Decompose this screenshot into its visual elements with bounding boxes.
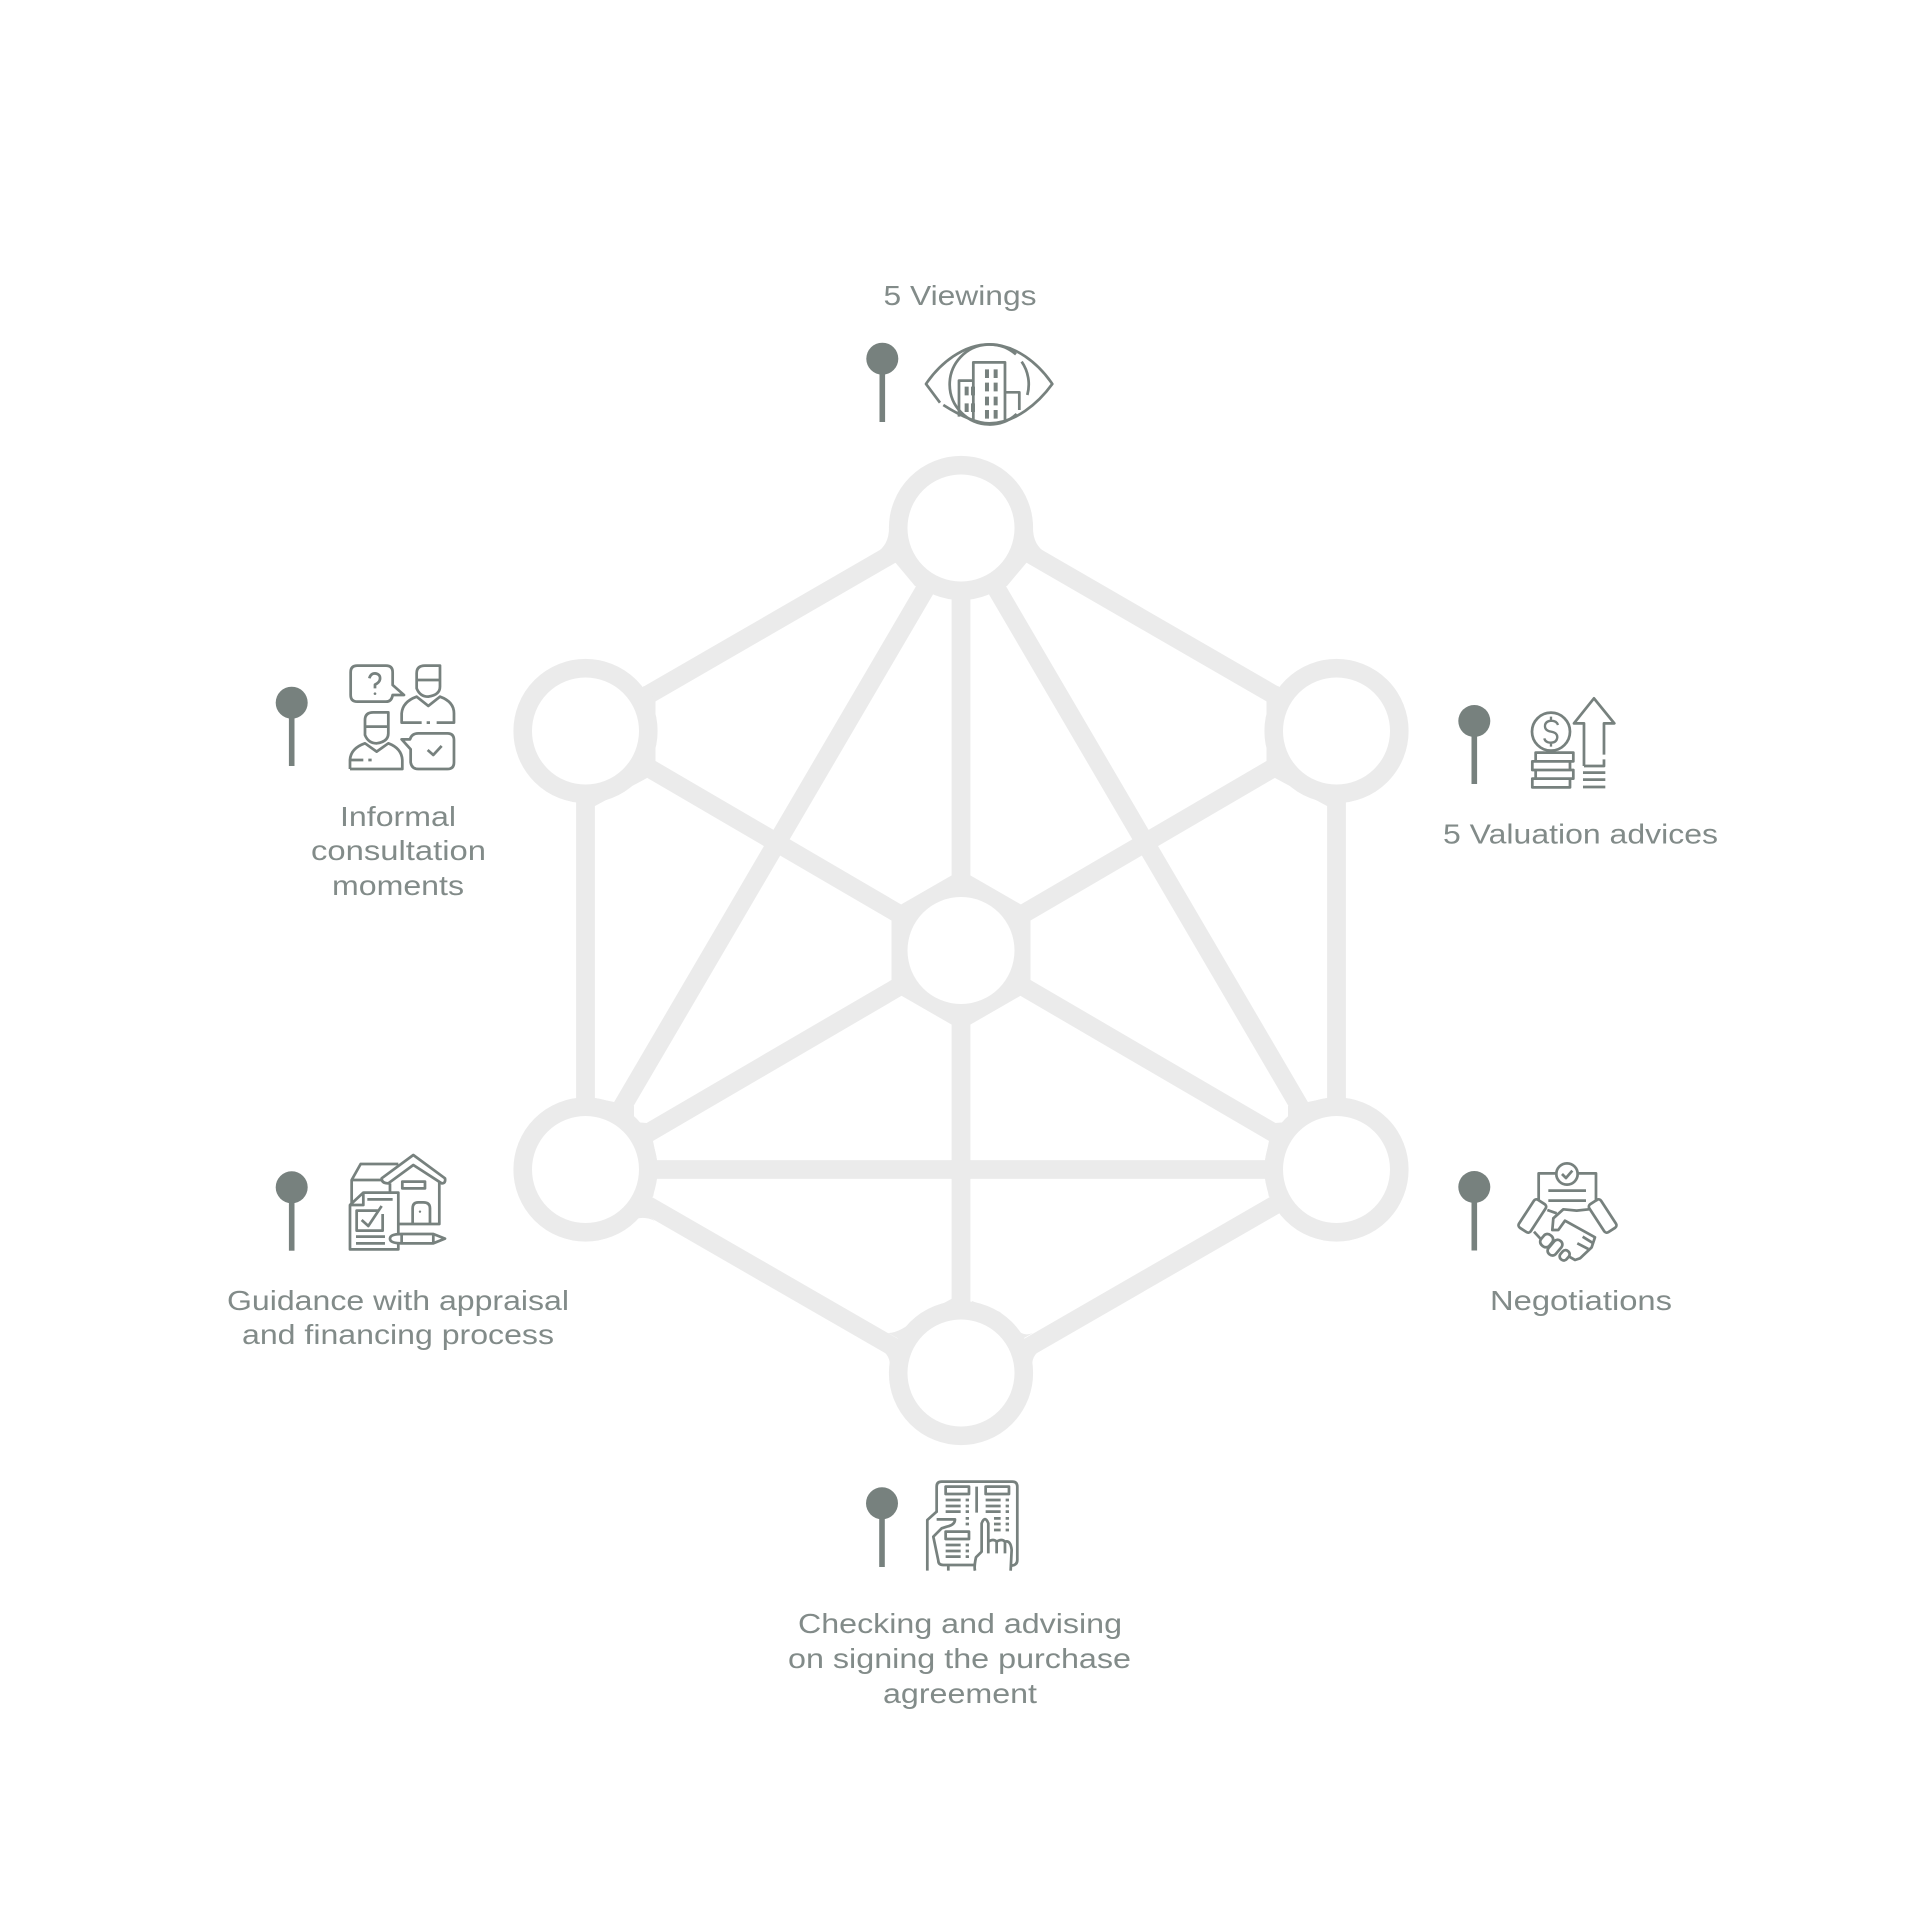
label: guidance: Guidance with appraisal [227,1285,569,1316]
icon: handshake and contract [1517,1163,1618,1262]
pin: checking [866,1487,898,1567]
icon: document and hand [927,1482,1017,1571]
icon: eye with buildings [926,344,1052,424]
pin: viewings [866,343,898,422]
label: 5 viewings: 5 Viewings [884,280,1036,311]
pin: consultation [276,687,308,766]
panel: guidance [227,1155,577,1350]
label: negotiations: Negotiations [1490,1285,1672,1316]
label: informal consultation moments: Informal [340,801,456,832]
icon: houses and document [350,1155,445,1249]
label: informal consultation moments: consultation [311,835,486,866]
label: checking and advising: agreement [883,1678,1037,1709]
network diagram [523,465,1399,1436]
label: guidance: and financing process [242,1319,554,1350]
icon: coins and arrow [1532,698,1614,787]
panel: negotiations [1458,1163,1672,1316]
label: valuation advices: 5 Valuation advices [1443,818,1718,850]
icon: two people talking [350,666,454,769]
panel: checking and advising [788,1482,1139,1709]
label: informal consultation moments: moments [332,870,464,901]
panel: 5 viewings [866,280,1052,424]
panel: 5 valuation advices [1443,698,1718,850]
pin: negotiations [1458,1171,1490,1250]
label: checking and advising: Checking and advising [798,1608,1122,1639]
label: checking and advising: on signing the purchase [788,1643,1131,1674]
pin: valuation [1458,705,1490,784]
panel: informal consultation [276,666,494,901]
pin: guidance [276,1171,308,1251]
